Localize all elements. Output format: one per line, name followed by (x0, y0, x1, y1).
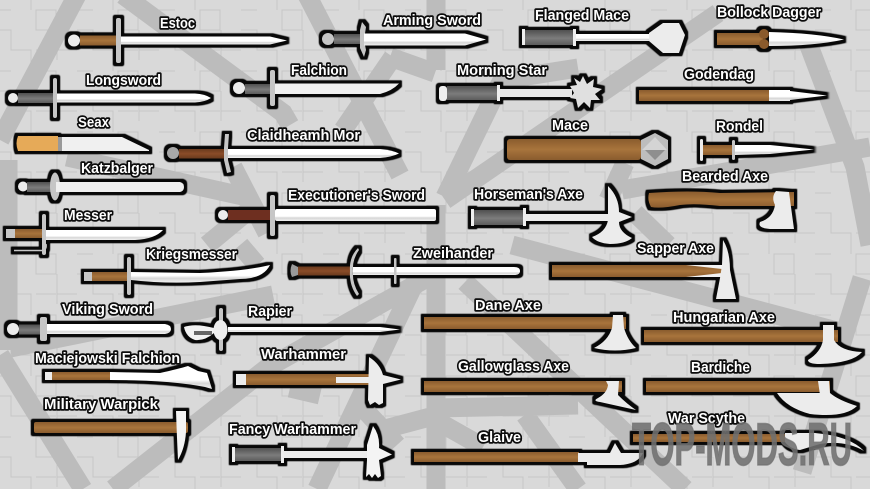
Claidheamh Mor drawing (167, 134, 399, 173)
weapon: Executioner's Sword (218, 187, 436, 236)
label: Messer: Messer (64, 207, 112, 224)
Messer drawing (6, 214, 163, 255)
label: Zweihander: Zweihander (413, 245, 493, 262)
label: Fancy Warhammer: Fancy Warhammer (229, 421, 356, 438)
label: Dane Axe: Dane Axe (475, 297, 541, 314)
weapon: Gallowglass Axe (424, 358, 636, 410)
label: Bearded Axe: Bearded Axe (682, 168, 768, 185)
War Scythe drawing (633, 433, 864, 451)
Bollock Dagger drawing (717, 29, 844, 49)
weapon: Glaive (414, 429, 643, 465)
weapon: Zweihander (290, 245, 520, 296)
label: Falchion: Falchion (291, 62, 347, 79)
Bardiche drawing (646, 381, 857, 415)
Viking Sword drawing (7, 317, 171, 341)
label: Arming Sword: Arming Sword (383, 12, 481, 29)
Longsword drawing (8, 78, 211, 118)
weapon: Maciejowski Falchion (35, 350, 212, 389)
label: Flanged Mace: Flanged Mace (535, 7, 629, 24)
label: Rapier: Rapier (248, 303, 292, 320)
label: Claidheamh Mor: Claidheamh Mor (247, 127, 360, 144)
weapon: Seax (16, 114, 149, 151)
weapon: War Scythe (633, 410, 864, 451)
Seax drawing (16, 136, 149, 151)
weapon: Fancy Warhammer (229, 421, 392, 478)
label: Longsword: Longsword (86, 72, 161, 89)
Rondel drawing (700, 139, 814, 161)
Executioner's Sword drawing (218, 195, 436, 236)
label: Rondel: Rondel (716, 118, 763, 135)
weapon: Mace (507, 117, 668, 166)
weapon: Arming Sword (322, 12, 486, 57)
weapon: Claidheamh Mor (167, 127, 399, 173)
label: Maciejowski Falchion: Maciejowski Falchion (35, 350, 180, 367)
Sapper Axe drawing (552, 240, 736, 299)
Military Warpick drawing (34, 411, 188, 460)
weapon: Morning Star (439, 62, 602, 108)
label: Seax: Seax (78, 114, 110, 131)
label: Warhammer: Warhammer (261, 346, 346, 363)
label: War Scythe: War Scythe (668, 410, 745, 427)
label: Glaive: Glaive (478, 429, 521, 446)
label: Mace: Mace (552, 117, 588, 134)
Maciejowski Falchion drawing (45, 366, 212, 389)
Morning Star drawing (439, 76, 602, 108)
Warhammer drawing (236, 357, 401, 405)
label: Viking Sword: Viking Sword (62, 301, 153, 318)
Estoc drawing (68, 18, 287, 63)
weapon: Sapper Axe (552, 240, 736, 299)
Glaive drawing (414, 443, 643, 465)
label: Hungarian Axe: Hungarian Axe (673, 309, 775, 326)
Arming Sword drawing (322, 22, 486, 57)
label: Military Warpick: Military Warpick (44, 396, 159, 413)
weapon: Warhammer (236, 346, 401, 405)
Mace drawing (507, 133, 668, 166)
label: Godendag: Godendag (684, 66, 754, 83)
weapon: Kriegsmesser (84, 246, 270, 295)
label: Sapper Axe: Sapper Axe (637, 240, 714, 257)
label: Morning Star: Morning Star (457, 62, 547, 79)
label: Bollock Dagger: Bollock Dagger (717, 4, 821, 21)
label: Executioner's Sword: Executioner's Sword (288, 187, 425, 204)
Gallowglass Axe drawing (424, 381, 636, 410)
weapon: Rondel (700, 118, 814, 161)
Rapier drawing (184, 308, 400, 351)
Falchion drawing (233, 70, 399, 106)
weapon: Godendag (639, 66, 827, 101)
weapon: Longsword (8, 72, 211, 118)
Flanged Mace drawing (522, 23, 685, 53)
weapon: Katzbalger (18, 160, 184, 200)
weapon: Bollock Dagger (717, 4, 844, 49)
weapon: Dane Axe (424, 297, 636, 350)
Zweihander drawing (290, 248, 520, 296)
Fancy Warhammer drawing (232, 426, 392, 478)
weapon: Falchion (233, 62, 399, 106)
Bearded Axe drawing (648, 191, 794, 229)
Dane Axe drawing (424, 315, 636, 350)
Katzbalger drawing (18, 172, 184, 200)
Hungarian Axe drawing (644, 325, 862, 364)
weapon: Rapier (184, 303, 400, 351)
label: Katzbalger: Katzbalger (81, 160, 153, 177)
weapon: Bardiche (646, 359, 857, 415)
label: Horseman's Axe: Horseman's Axe (474, 186, 583, 203)
Kriegsmesser drawing (84, 257, 270, 295)
weapon: Viking Sword (7, 301, 171, 341)
label: Bardiche: Bardiche (691, 359, 750, 376)
weapon: Bearded Axe (648, 168, 794, 229)
label: Kriegsmesser: Kriegsmesser (146, 246, 237, 263)
Horseman's Axe drawing (471, 186, 632, 244)
weapon: Messer (6, 207, 163, 255)
weapon: Estoc (68, 15, 287, 63)
weapon: Military Warpick (34, 396, 188, 460)
label: Estoc: Estoc (160, 15, 195, 32)
Godendag drawing (639, 90, 827, 101)
weapon: Hungarian Axe (644, 309, 862, 364)
weapon: Flanged Mace (522, 7, 685, 53)
weapon: Horseman's Axe (471, 186, 632, 244)
label: Gallowglass Axe: Gallowglass Axe (458, 358, 569, 375)
